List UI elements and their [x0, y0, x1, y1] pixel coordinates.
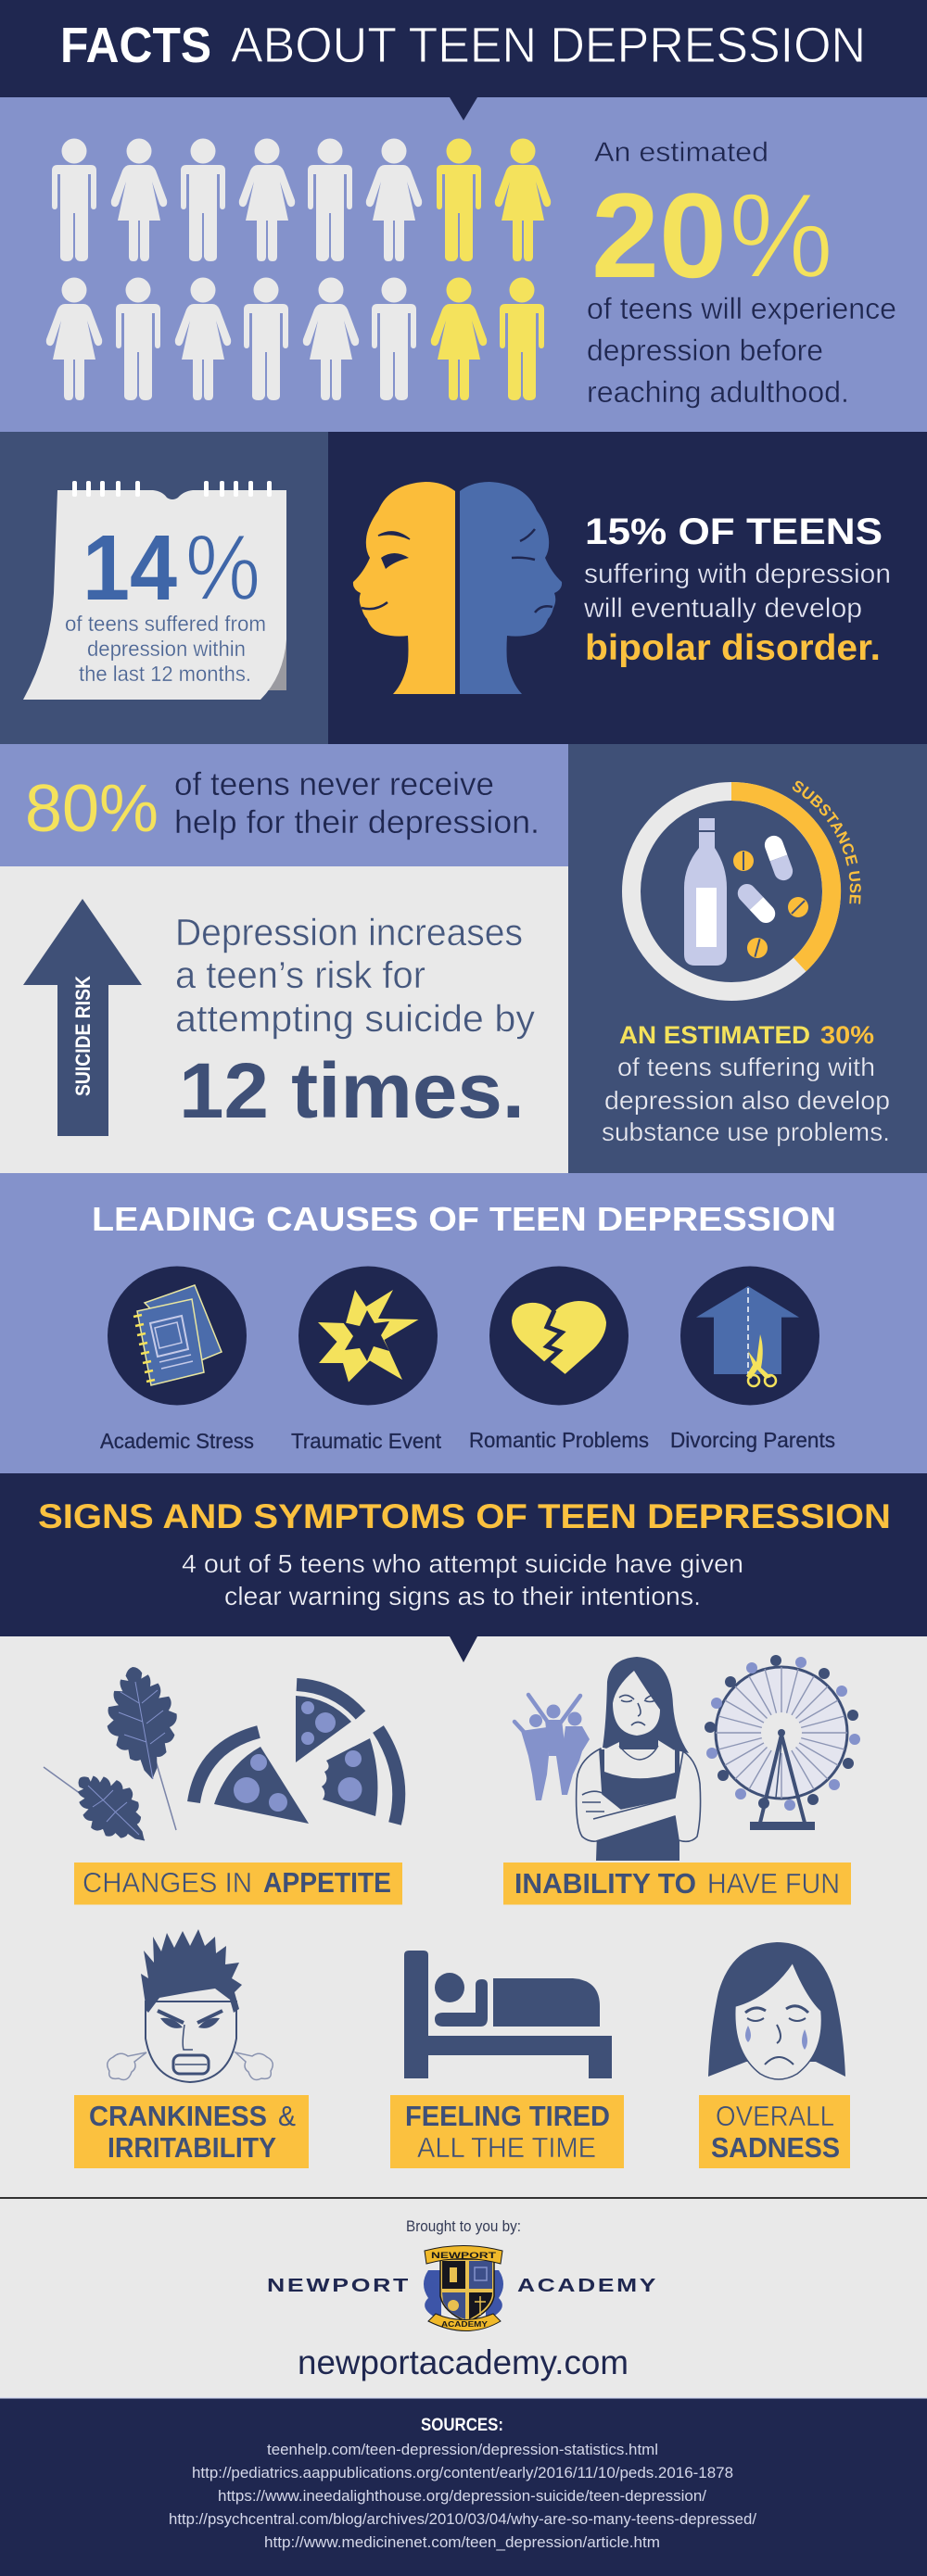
text: source list: teenhelp.com/teen-depression/depression-statistics.html: [267, 2441, 658, 2458]
label: crankiness and irritability: [74, 2095, 309, 2168]
text: brought to you by: Brought to you by:: [406, 2217, 521, 2235]
text: warning signs: [182, 1549, 743, 1610]
statistic: 20 percent: [591, 168, 833, 303]
logo: newport academy wordmark: NEWPORT: [267, 2276, 411, 2296]
text: 14 percent caption: the last 12 months.: [79, 662, 251, 686]
label: changes in appetite: CHANGES IN: [83, 1866, 252, 1899]
label: crankiness and irritability: CRANKINESS: [89, 2100, 267, 2132]
label: crankiness and irritability: IRRITABILITY: [108, 2131, 276, 2164]
panel: suicide risk: [0, 866, 568, 1173]
icon: pizza slices: [194, 1685, 399, 1824]
label: traumatic event: Traumatic Event: [291, 1429, 442, 1453]
logo: newport academy wordmark: ACADEMY: [517, 2276, 658, 2296]
label: feeling tired: ALL THE TIME: [417, 2131, 596, 2164]
panel: signs and symptoms header: [0, 1473, 927, 1662]
icon: calendar page: [23, 481, 286, 700]
statistic: 14 percent: 14: [83, 516, 177, 620]
icon: bottle: [684, 818, 727, 966]
text: eventually develop: will eventually develop: [583, 593, 862, 624]
text: eventually develop: [583, 559, 891, 624]
pictogram row 1: [52, 139, 551, 261]
panel: 80 percent never receive help: [0, 744, 568, 866]
text: depression increases risk: attempting suicide by: [175, 997, 536, 1040]
icon: pills: [733, 833, 808, 958]
heading: sources: SOURCES:: [421, 2416, 503, 2435]
text: never receive help: help for their depression.: [174, 804, 540, 840]
panel: substance use: [568, 744, 927, 1173]
text: depression increases risk: [175, 911, 536, 1040]
text: source list: [169, 2441, 756, 2551]
logo: newport academy wordmark: [267, 2276, 658, 2296]
icon: divorcing parents house: [680, 1266, 819, 1405]
text: depression increases risk: Depression increases: [175, 911, 523, 953]
statistic: 20 percent: 20: [591, 168, 727, 303]
logo: crest: ACADEMY: [441, 2320, 489, 2329]
label: overall sadness: SADNESS: [711, 2131, 840, 2164]
icon: traumatic event explosion: [298, 1266, 438, 1405]
text: never receive help: [174, 766, 540, 840]
panel: 14 percent calendar: [0, 432, 328, 744]
heading: signs and symptoms: SIGNS AND SYMPTOMS OF TEEN DEPRESSION: [38, 1497, 891, 1535]
heading: an estimated 30 percent: AN ESTIMATED: [619, 1021, 810, 1049]
heading: 15 percent of teens: 15% OF TEENS: [585, 511, 883, 552]
statistic: 14 percent: [83, 516, 260, 620]
icon: ferris wheel: [705, 1655, 860, 1830]
text: substance use problems: of teens suffering with: [617, 1053, 875, 1081]
statistic: 80 percent: 80%: [25, 772, 159, 846]
text: substance use problems: [602, 1053, 890, 1146]
text: depression increases risk: a teen’s risk for: [175, 953, 425, 996]
label: feeling tired: FEELING TIRED: [405, 2100, 610, 2132]
label: inability to have fun: [503, 1863, 851, 1905]
label: inability to have fun: HAVE FUN: [707, 1867, 840, 1900]
label: changes in appetite: APPETITE: [263, 1866, 391, 1899]
panel: 20 percent of teens: [0, 97, 927, 432]
text: substance use problems: substance use problems.: [602, 1118, 890, 1146]
label: divorcing parents: Divorcing Parents: [670, 1428, 835, 1452]
pointer arrow: [450, 1636, 477, 1662]
text: never receive help: of teens never receive: [174, 766, 494, 802]
label: feeling tired: [390, 2095, 624, 2168]
logo: crest: [424, 2246, 503, 2331]
panel: symptoms of depression: [0, 1636, 927, 2198]
panel: bipolar disorder: [328, 432, 927, 744]
text: source list: http://pediatrics.aappublications.org/content/early/2016/11/10/peds.2016-1878: [192, 2464, 733, 2481]
icon: person in bed: [404, 1951, 612, 2078]
text: 14 percent caption: of teens suffered from: [65, 612, 266, 636]
label: changes in appetite: [74, 1863, 402, 1905]
label: romantic problems: Romantic Problems: [469, 1428, 649, 1452]
label: overall sadness: OVERALL: [716, 2100, 834, 2132]
heading: leading causes: LEADING CAUSES OF TEEN DEPRESSION: [92, 1200, 836, 1238]
icon: oak leaves: [44, 1661, 187, 1861]
text: bipolar disorder: bipolar disorder.: [585, 628, 881, 668]
text: experience before adulthood: of teens will experience: [587, 292, 896, 325]
text: source list: http://www.medicinenet.com/teen_depression/article.htm: [264, 2533, 660, 2551]
text: 14 percent caption: [65, 612, 266, 686]
text: 14 percent caption: depression within: [87, 637, 246, 661]
icon: partying friends silhouette: [514, 1695, 590, 1800]
text: source list: https://www.ineedalighthouse.org/depression-suicide/teen-depression/: [218, 2487, 706, 2505]
text: source list: http://psychcentral.com/blog/archives/2010/03/04/why-are-so-many-teens-depressed/: [169, 2510, 756, 2528]
text: experience before adulthood: [587, 292, 896, 409]
title: ABOUT TEEN DEPRESSION: [231, 18, 866, 73]
text: substance use problems: depression also develop: [604, 1086, 890, 1115]
pictogram row 2: [46, 278, 544, 400]
label: substance use: SUBSTANCE USE: [792, 780, 861, 904]
icon: sad girl with crossed arms: [577, 1657, 701, 1861]
logo: crest: NEWPORT: [431, 2251, 497, 2260]
header pointer arrow: [450, 97, 477, 120]
icon: crying woman: [708, 1942, 845, 2079]
text: experience before adulthood: reaching adulthood.: [587, 375, 849, 409]
statistic: 12 times: 12 times.: [179, 1047, 525, 1134]
icon: romantic problems broken heart: [489, 1266, 629, 1405]
label: academic stress: Academic Stress: [100, 1429, 254, 1453]
label: overall sadness: [699, 2095, 850, 2168]
panel: sponsor: [0, 2197, 927, 2398]
icon: two-sided face: [353, 482, 562, 694]
panel: title header: [0, 0, 927, 97]
text: experience before adulthood: depression before: [587, 334, 823, 367]
arrow: suicide risk: SUICIDE RISK: [71, 976, 95, 1096]
text: website: newportacademy.com: [298, 2343, 629, 2381]
title: FACTS: [60, 18, 211, 73]
panel: sources footer: [0, 2397, 927, 2576]
text: an estimated: An estimated: [594, 137, 768, 168]
chart: substance use ring: [631, 791, 832, 991]
text: warning signs: clear warning signs as to their intentions.: [224, 1582, 701, 1610]
statistic: 14 percent: %: [185, 516, 260, 620]
text: eventually develop: suffering with depression: [584, 559, 891, 589]
arrow: suicide risk: [23, 899, 142, 1136]
panel: leading causes: [0, 1173, 927, 1473]
label: crankiness and irritability: &: [278, 2100, 296, 2132]
icon: academic stress notebooks: [108, 1266, 247, 1405]
heading: an estimated 30 percent: 30%: [820, 1021, 874, 1049]
text: warning signs: 4 out of 5 teens who attempt suicide have given: [182, 1549, 743, 1578]
statistic: 20 percent: %: [729, 168, 833, 303]
label: inability to have fun: INABILITY TO: [514, 1867, 696, 1900]
icon: angry boy: [108, 1929, 273, 2082]
